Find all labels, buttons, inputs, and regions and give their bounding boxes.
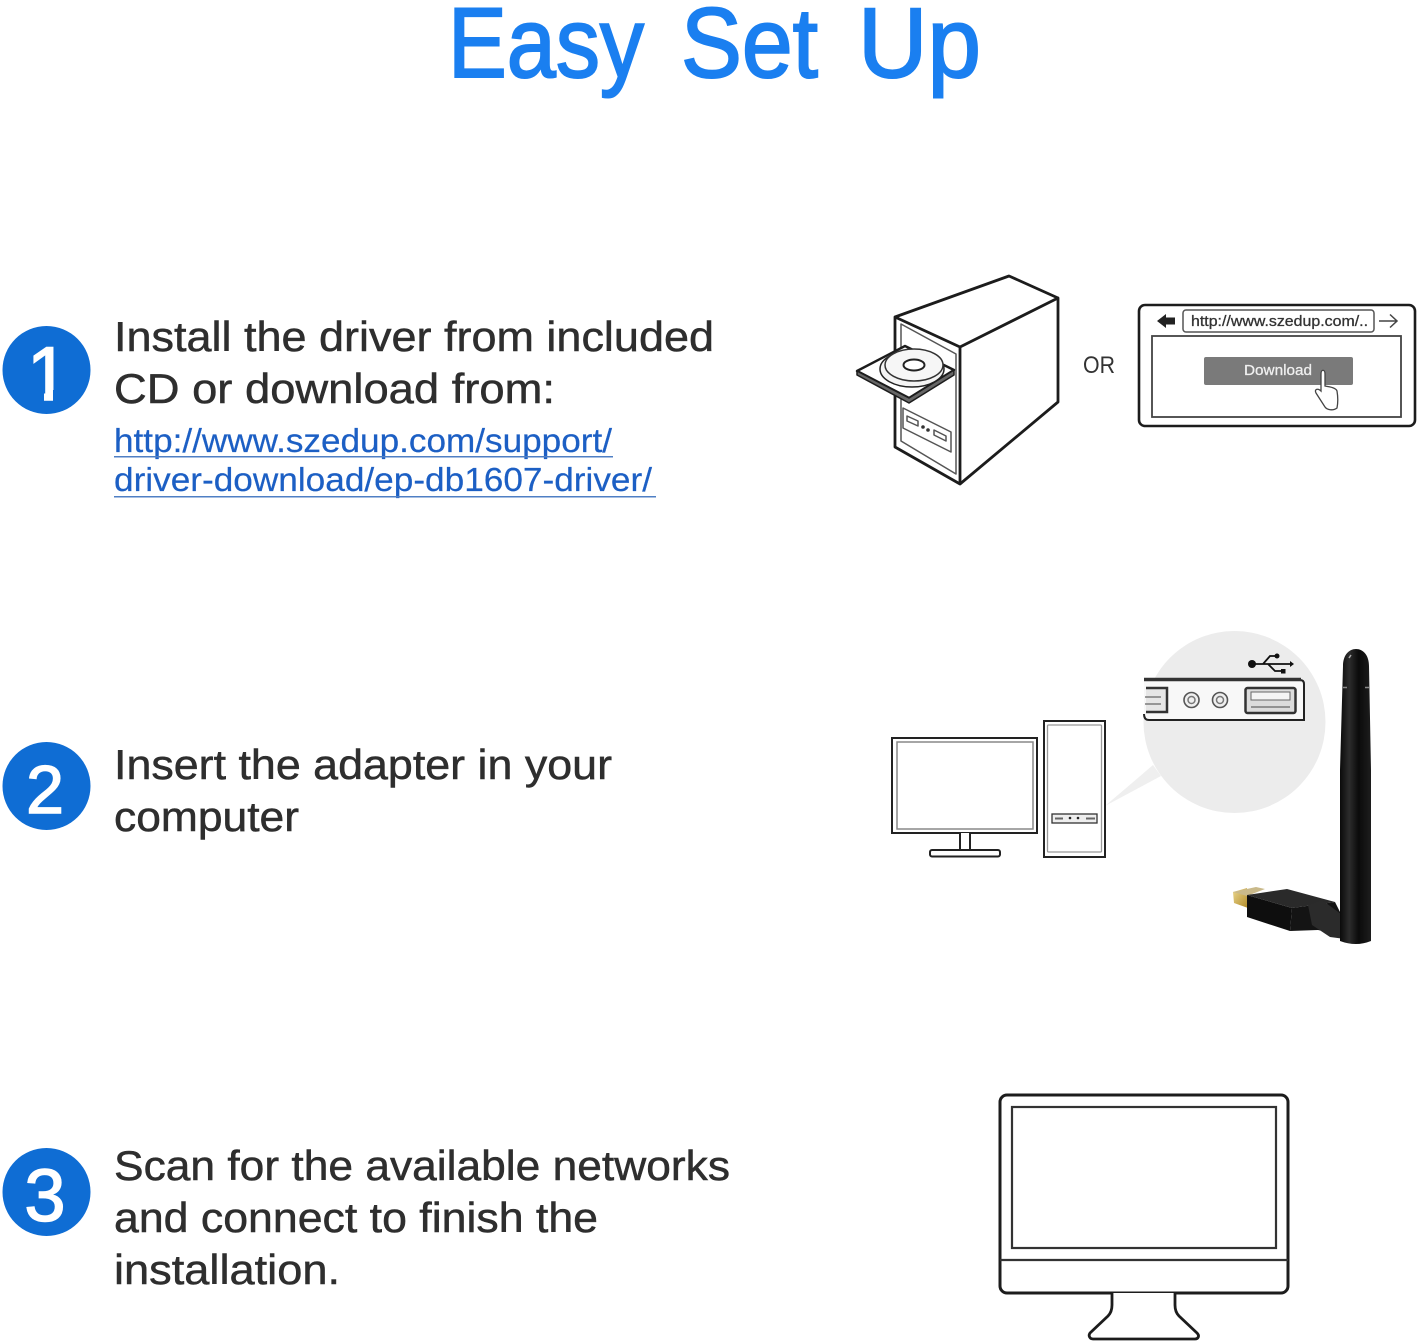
step 1	[2, 276, 1415, 498]
icon: browser window with download button	[1139, 305, 1415, 426]
icon: zoom circle with USB port	[1105, 631, 1326, 813]
step 2	[2, 631, 1371, 944]
step 3 number badge: 3	[24, 1154, 66, 1237]
photo: USB WiFi adapter with antenna	[1233, 649, 1371, 944]
step 2 number badge	[2, 742, 90, 830]
icon: computer tower with CD tray	[857, 276, 1058, 484]
step 3 number badge	[2, 1148, 90, 1237]
OR label: OR	[1083, 352, 1115, 379]
title	[448, 0, 981, 98]
step 3 instruction text: installation.	[114, 1246, 340, 1293]
step 1 number badge	[2, 326, 90, 417]
step 2 number badge: 2	[26, 752, 64, 828]
step 1 number badge: 1	[27, 332, 69, 417]
driver download link	[114, 422, 656, 498]
step 1 instruction text: Install the driver from included	[114, 313, 714, 360]
step 3	[2, 1095, 1288, 1339]
step 1 instruction text	[114, 313, 714, 412]
driver download link: http://www.szedup.com/support/	[114, 422, 613, 459]
step 1 instruction text: CD or download from:	[114, 365, 555, 412]
icon: desktop monitor	[892, 738, 1037, 856]
icon: desktop tower	[1044, 721, 1105, 857]
driver download link: driver-download/ep-db1607-driver/	[114, 461, 653, 498]
step 2 instruction text	[114, 741, 612, 840]
icon: USB symbol	[1248, 654, 1294, 674]
icon: monitor	[1000, 1095, 1288, 1339]
icon: browser window with download button: Download	[1244, 362, 1312, 379]
step 3 instruction text	[114, 1142, 730, 1293]
step 3 instruction text: and connect to finish the	[114, 1194, 598, 1241]
icon: browser window with download button: http://www.szedup.com/..	[1191, 314, 1368, 330]
step 2 instruction text: computer	[114, 793, 299, 840]
step 3 instruction text: Scan for the available networks	[114, 1142, 730, 1189]
step 2 instruction text: Insert the adapter in your	[114, 741, 612, 788]
